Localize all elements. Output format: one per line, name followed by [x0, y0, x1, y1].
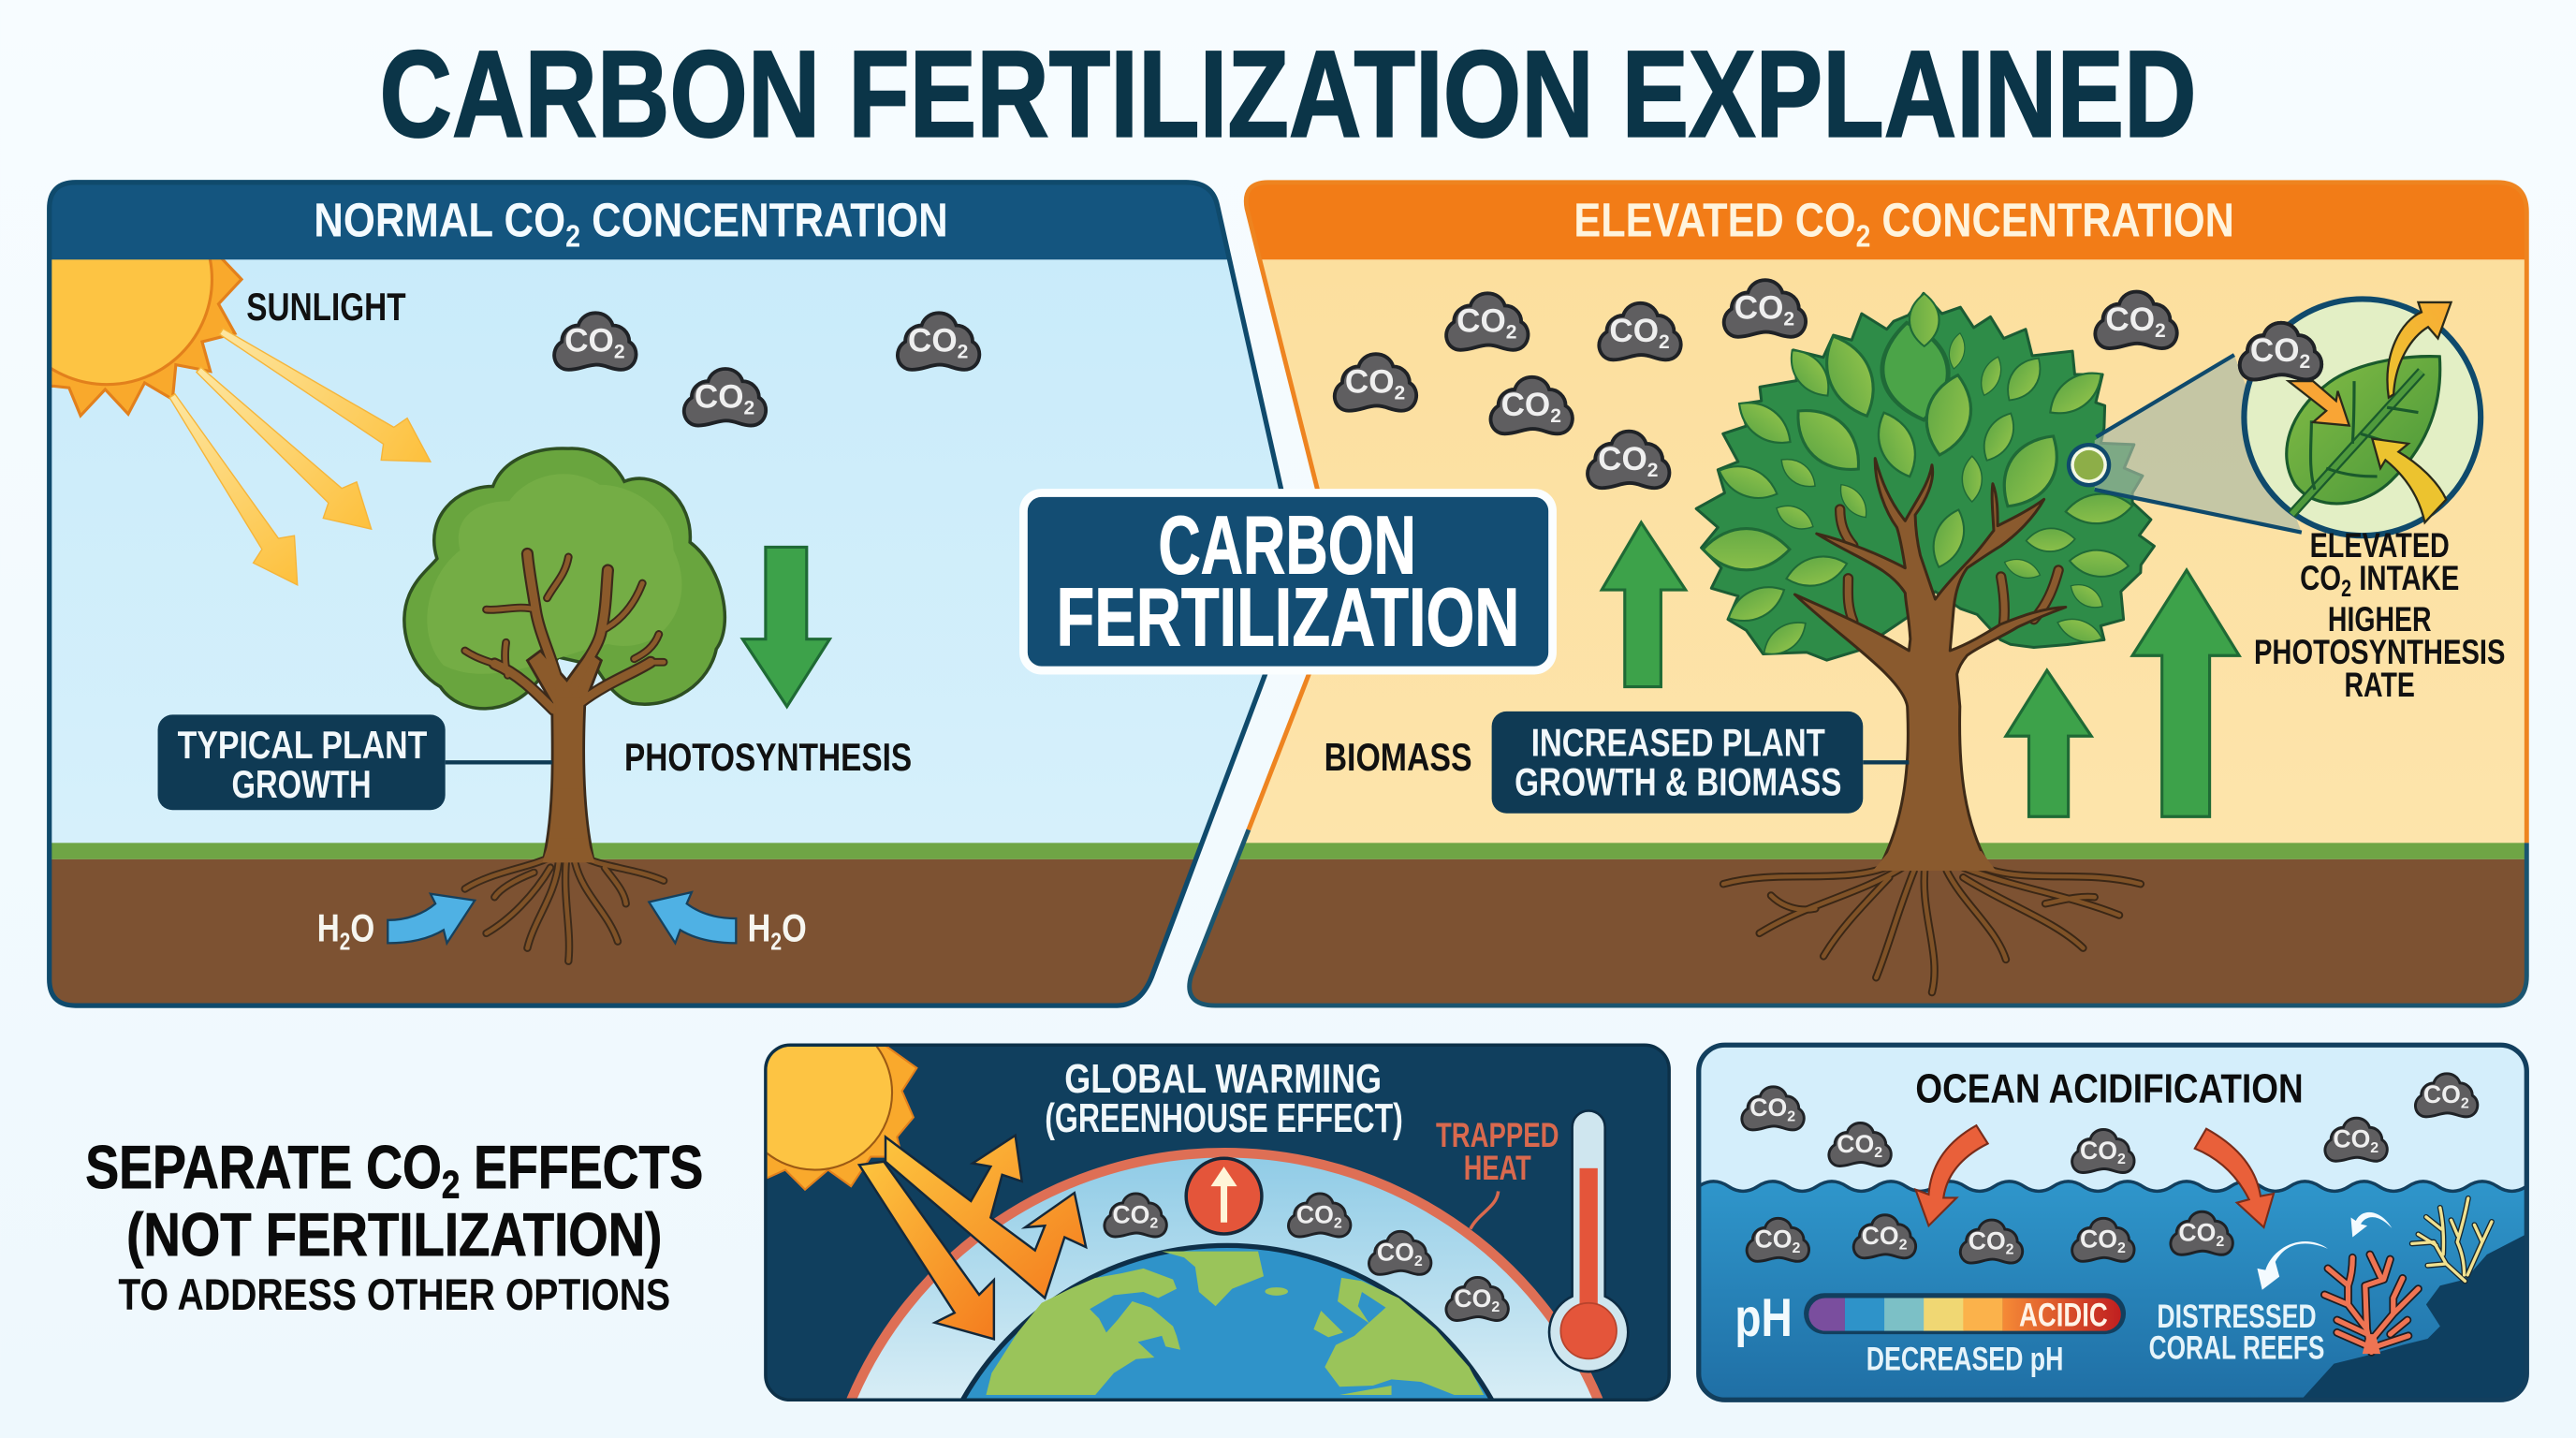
- magnified leaf callout: [2067, 299, 2481, 536]
- panel heading: elevated: 2: [1856, 219, 1870, 254]
- CO2 cloud: [1599, 303, 1681, 360]
- text: elevated intake: CO: [2300, 559, 2351, 597]
- CO2 cloud: 2: [1659, 331, 1670, 353]
- CO2 cloud: 2: [2117, 1240, 2126, 1256]
- CO2 cloud: 2: [2370, 1140, 2378, 1156]
- pH scale bar: [1804, 1293, 2126, 1334]
- label: H2O right: O: [782, 906, 807, 950]
- tree: elevated growth: [1696, 293, 2154, 992]
- CO2 cloud: CO: [564, 323, 614, 360]
- CO2 cloud: [1724, 280, 1806, 337]
- CO2 cloud: CO: [908, 323, 958, 360]
- tree: typical plant: [404, 448, 724, 961]
- arrow: coral distress small: [2351, 1212, 2392, 1238]
- label: distressed coral reefs: DISTRESSED: [2157, 1299, 2317, 1335]
- panel: normal CO2 concentration: [2, 172, 1331, 1010]
- CO2 cloud: [2415, 1074, 2478, 1117]
- text block: separate CO2 effects: (NOT FERTILIZATION): [126, 1200, 662, 1269]
- CO2 cloud: [1446, 293, 1528, 350]
- panel: ocean acidification: [1699, 1045, 2556, 1405]
- text block: separate CO2 effects: SEPARATE CO: [85, 1133, 516, 1201]
- CO2 cloud: 2: [958, 342, 968, 363]
- arrow: coral distress large: [2257, 1241, 2328, 1290]
- CO2 cloud: 2: [1149, 1216, 1158, 1232]
- label: trapped heat: HEAT: [1464, 1149, 1531, 1187]
- CO2 cloud: CO: [2333, 1125, 2370, 1153]
- icon: red coral: [2324, 1255, 2418, 1354]
- leaves: [1703, 293, 2133, 663]
- CO2 cloud: CO: [1862, 1222, 1899, 1250]
- CO2 cloud: [1288, 1194, 1351, 1237]
- arrow: growth up large: [2132, 570, 2239, 816]
- subheading: greenhouse effect: (GREENHOUSE EFFECT): [1045, 1095, 1403, 1141]
- CO2 cloud: CO: [1501, 387, 1550, 423]
- label: H2O left: O: [350, 906, 374, 950]
- text: elevated intake: 2: [2341, 577, 2351, 602]
- CO2 cloud: CO: [1837, 1130, 1874, 1158]
- icon: sun: [51, 259, 243, 418]
- title: CARBON FERTILIZATION EXPLAINED: [379, 25, 2197, 163]
- CO2 cloud: CO: [1755, 1225, 1793, 1254]
- text block: separate CO2 effects: EFFECTS: [460, 1133, 703, 1201]
- label: increased plant growth and biomass: GROWTH & BIOMASS: [1515, 759, 1841, 803]
- CO2 cloud: [1446, 1277, 1508, 1320]
- text: elevated intake: ELEVATED: [2310, 526, 2450, 565]
- pH scale bar: ACIDIC: [2019, 1297, 2108, 1333]
- CO2 cloud: 2: [2117, 1152, 2126, 1167]
- CO2 cloud: 2: [1783, 308, 1794, 330]
- CO2 cloud: [1491, 377, 1573, 433]
- text block: separate CO2 effects: [85, 1133, 703, 1320]
- CO2 cloud: 2: [1874, 1145, 1882, 1161]
- arrow: yellow uptake: [2372, 439, 2446, 522]
- CO2 cloud: CO: [1454, 1284, 1491, 1313]
- CO2 cloud: CO: [1609, 313, 1659, 349]
- label: H2O right: H: [748, 906, 776, 950]
- center badge: carbon fertilization: FERTILIZATION: [1057, 572, 1519, 664]
- label: typical plant growth: GROWTH: [232, 762, 372, 806]
- CO2 cloud: [2095, 292, 2177, 348]
- label: distressed coral reefs: [2149, 1299, 2324, 1366]
- CO2 cloud: CO: [1598, 441, 1647, 477]
- CO2 cloud: [1368, 1231, 1431, 1274]
- heading: ocean acidification: OCEAN ACIDIFICATION: [1915, 1066, 2304, 1112]
- label: typical plant growth: [158, 714, 552, 810]
- panel: global warming: [764, 1043, 1671, 1401]
- icon: rising temperature: [1186, 1158, 1262, 1234]
- text: elevated intake: HIGHER: [2328, 600, 2431, 638]
- label: pH: pH: [1734, 1288, 1793, 1348]
- seabed rock: [2300, 1232, 2530, 1401]
- CO2 cloud: 2: [1787, 1109, 1795, 1125]
- label: H2O left: H: [317, 906, 345, 950]
- arrow: incoming sunlight: [859, 1162, 994, 1339]
- CO2 cloud: [1742, 1087, 1804, 1130]
- CO2 cloud: 2: [1394, 382, 1405, 404]
- CO2 cloud: 2: [1550, 405, 1561, 427]
- arrow: CO2 absorbed right: [2195, 1129, 2274, 1227]
- CO2 cloud: 2: [2006, 1242, 2014, 1258]
- label: distressed coral reefs: CORAL REEFS: [2149, 1329, 2324, 1366]
- icon: thermometer: [1549, 1110, 1628, 1372]
- CO2 cloud: [2240, 323, 2321, 379]
- CO2 cloud: [1588, 432, 1669, 488]
- label: increased plant growth and biomass: [1492, 712, 1909, 814]
- label: sunlight: SUNLIGHT: [246, 285, 406, 329]
- CO2 cloud: CO: [2080, 1225, 2117, 1254]
- label: biomass: BIOMASS: [1325, 735, 1472, 779]
- panel heading: normal: NORMAL CO: [314, 194, 607, 247]
- label: photosynthesis: PHOTOSYNTHESIS: [624, 735, 912, 779]
- panel: elevated CO2 concentration: [1150, 172, 2546, 1010]
- text: elevated intake: INTAKE: [2351, 559, 2459, 597]
- icon: sun: [768, 1047, 918, 1191]
- sun rays: [152, 311, 444, 598]
- text: elevated intake: PHOTOSYNTHESIS: [2254, 633, 2505, 671]
- CO2 cloud: [2072, 1130, 2134, 1173]
- label: trapped heat: TRAPPED: [1436, 1116, 1559, 1154]
- CO2 cloud: 2: [1414, 1254, 1423, 1269]
- text: elevated intake: [2254, 526, 2505, 704]
- CO2 cloud: CO: [1112, 1200, 1149, 1228]
- label: trapped heat: [1436, 1116, 1559, 1229]
- CO2 cloud: 2: [2216, 1234, 2224, 1250]
- CO2 cloud: [554, 313, 637, 370]
- CO2 cloud: 2: [2461, 1096, 2469, 1112]
- panel heading: elevated: ELEVATED CO: [1573, 194, 1906, 247]
- CO2 cloud: CO: [2423, 1080, 2461, 1108]
- CO2 cloud: [898, 313, 979, 370]
- CO2 cloud: 2: [1899, 1237, 1908, 1253]
- CO2 cloud: [684, 369, 766, 426]
- CO2 cloud: CO: [1749, 1093, 1787, 1122]
- arrow: growth up small left: [1602, 522, 1686, 687]
- arrow: photosynthesis down: [742, 547, 829, 707]
- CO2 cloud: CO: [2105, 301, 2155, 338]
- CO2 cloud: 2: [1491, 1299, 1500, 1315]
- heading: global warming: GLOBAL WARMING: [1064, 1056, 1382, 1102]
- CO2 cloud: CO: [2250, 332, 2299, 369]
- CO2 cloud: [2171, 1211, 2232, 1255]
- CO2 cloud: 2: [1506, 322, 1517, 344]
- CO2 cloud: 2: [1793, 1240, 1801, 1256]
- CO2 cloud: 2: [614, 342, 625, 363]
- CO2 cloud: [1853, 1215, 1916, 1258]
- arrow: water left: [388, 894, 475, 943]
- CO2 cloud: CO: [1734, 289, 1783, 326]
- CO2 cloud: 2: [1647, 460, 1658, 481]
- label: decreased pH: DECREASED pH: [1866, 1342, 2063, 1378]
- arrow: growth up middle: [2006, 670, 2091, 816]
- icon: leaf: [2287, 357, 2440, 514]
- panel heading: normal: 2: [565, 219, 580, 254]
- text: elevated intake: RATE: [2344, 666, 2415, 704]
- CO2 cloud: 2: [2299, 351, 2310, 373]
- CO2 cloud: CO: [1345, 363, 1394, 400]
- CO2 cloud: [2072, 1218, 2134, 1261]
- CO2 cloud: 2: [1334, 1216, 1342, 1232]
- panel heading: elevated: CONCENTRATION: [1870, 194, 2234, 247]
- CO2 cloud: CO: [1296, 1200, 1334, 1228]
- atmosphere dome: [849, 1152, 1601, 1405]
- icon: bleached coral: [2412, 1198, 2492, 1281]
- arrow: water right: [649, 892, 736, 943]
- label: H2O right: 2: [770, 927, 782, 955]
- CO2 cloud: 2: [743, 397, 754, 418]
- arrow: CO2 absorbed left: [1915, 1125, 1988, 1225]
- CO2 cloud: CO: [2080, 1137, 2117, 1165]
- center badge: carbon fertilization: [1023, 493, 1553, 670]
- CO2 cloud: CO: [1456, 303, 1506, 340]
- CO2 cloud: [1105, 1194, 1166, 1237]
- label: increased plant growth and biomass: INCREASED PLANT: [1531, 720, 1825, 764]
- CO2 cloud: [2325, 1118, 2387, 1161]
- CO2 cloud: [1829, 1123, 1891, 1167]
- CO2 cloud: [1960, 1220, 2023, 1263]
- arrow: CO2 in: [2289, 381, 2349, 426]
- CO2 cloud: 2: [2155, 320, 2166, 342]
- arrow: oxygen out: [2387, 302, 2452, 398]
- CO2 cloud: CO: [695, 378, 743, 415]
- earth: [960, 1245, 1495, 1405]
- CO2 cloud: [1747, 1218, 1809, 1261]
- panel heading: normal: CONCENTRATION: [580, 194, 948, 247]
- label: typical plant growth: TYPICAL PLANT: [178, 723, 428, 767]
- text block: separate CO2 effects: TO ADDRESS OTHER OPTIONS: [118, 1270, 670, 1320]
- CO2 cloud: CO: [1969, 1226, 2006, 1255]
- center badge: carbon fertilization: CARBON: [1158, 500, 1416, 592]
- text block: separate CO2 effects: 2: [442, 1162, 460, 1206]
- arrow: reflected heat: [886, 1136, 1086, 1298]
- CO2 cloud: CO: [1377, 1239, 1414, 1267]
- label: H2O left: 2: [340, 927, 350, 955]
- CO2 cloud: [1335, 354, 1416, 411]
- CO2 cloud: CO: [2178, 1219, 2216, 1247]
